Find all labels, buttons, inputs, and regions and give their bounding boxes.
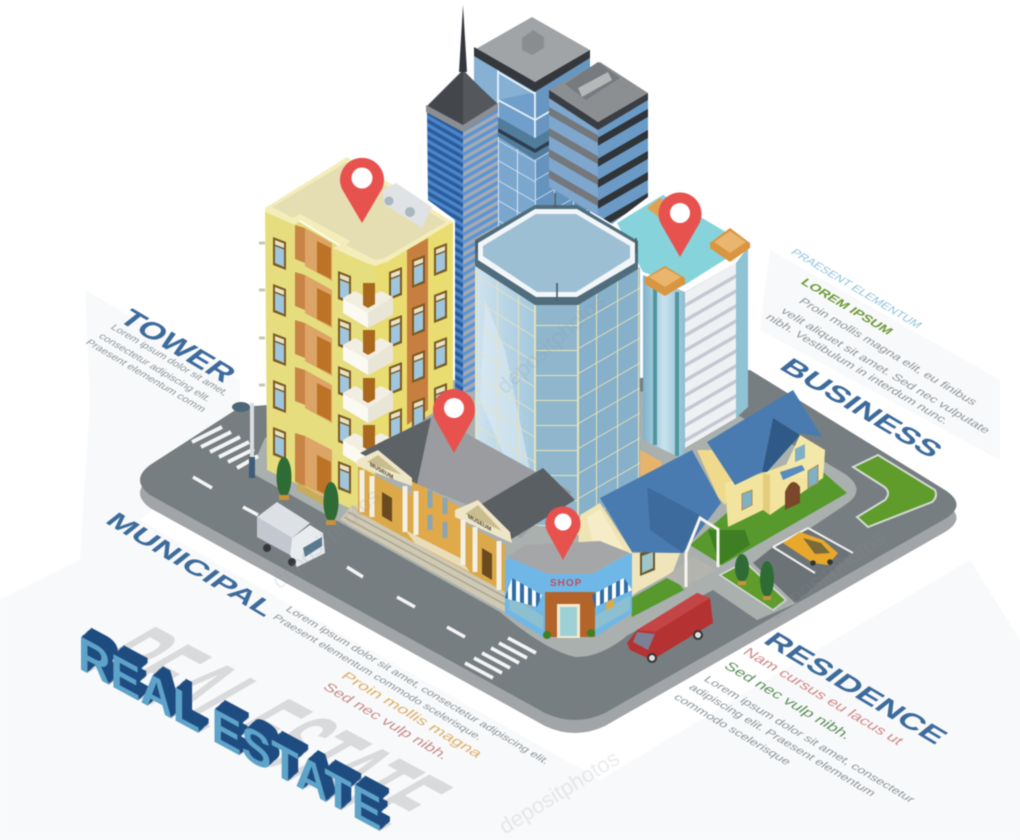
text block: tower: consectetur adipiscing elit. [96,332,213,404]
building: shop: SHOP [550,578,582,589]
building: museum [340,415,575,612]
trees [276,457,338,525]
text block: residence: Nam cursus eu lacus ut [740,645,908,747]
building: house with gables [697,390,825,527]
text block: residence: Sed nec vulp nibh. [721,659,856,742]
vehicle: white truck [257,502,325,567]
vehicle: red van [627,593,713,662]
road markings [192,427,536,678]
sidewalks [250,380,856,657]
text block: business: velit aliquet sit amet. Sed nec vulputate [778,306,993,436]
text block: tower [83,304,243,414]
text block: residence: adipiscing elit. Praesent elementum [686,682,878,798]
location pin: shop [546,506,580,560]
vehicle: yellow car [783,532,838,566]
title shadow: REAL ESTATE [54,612,479,840]
building: glass blue tower [474,17,590,265]
text block: municipal: Praesent elementum commodo scelerisque. [270,613,485,742]
building: museum: MUSEUM [468,514,491,533]
lawn with curved path [853,455,936,527]
text block: business: BUSINESS [773,354,948,463]
parking lot [753,528,853,603]
text block: business: nibh. Vestibulum in interdum nunc. [763,312,952,426]
text block: business [763,247,993,463]
lawn around houses [628,472,847,617]
text block: municipal [99,508,552,766]
text block: residence: RESIDENCE [757,628,953,749]
text block: business: PRAESENT ELEMENTUM [788,247,924,330]
building: teal and white tower [617,195,750,482]
stock watermarks: depositphotos [494,745,624,839]
building: museum: MUSEUM [370,462,393,481]
building: dark blue spire tower [426,5,498,393]
text block: municipal: Proin mollis magna [338,669,487,760]
text block: residence: commodo scelerisque [671,692,794,767]
text block: tower: TOWER [112,304,243,387]
building: house with porch [575,450,721,600]
stock watermarks: depositphotos [267,483,385,594]
text block: municipal: Lorem ipsum dolor sit amet, consectetur adipiscing elit. [283,605,552,766]
building: shop [505,541,632,639]
location pin: business [658,192,702,257]
stock watermarks: depositphotos [764,525,890,624]
title: real estate: REAL ESTATE [78,626,382,840]
text block: residence: Lorem ipsum dolor sit amet, consectetur [701,674,918,805]
stock watermarks: depositphotos [492,288,610,399]
stock watermarks [267,288,890,839]
city base plate [140,370,956,733]
text block: tower: Praesent elementum comm [83,338,208,414]
text block: business: Proin mollis magna elit, eu finibus [796,296,980,408]
text block: residence [671,628,953,805]
location pin: tower [340,158,384,223]
building: yellow apartment block [259,157,453,520]
text block: municipal: MUNICIPAL [99,508,282,621]
text block: municipal: Sed nec vulp nibh. [320,680,453,762]
text block: tower: Lorem ipsum dolor sit amet, [108,323,231,398]
text block: business: LOREM IPSUM [798,276,896,337]
building: dark banded tower [549,62,648,224]
planting bed with trees [720,554,786,610]
location pin: municipal [433,389,475,453]
building: octagonal glass tower [475,193,640,535]
street lamp [232,402,255,478]
